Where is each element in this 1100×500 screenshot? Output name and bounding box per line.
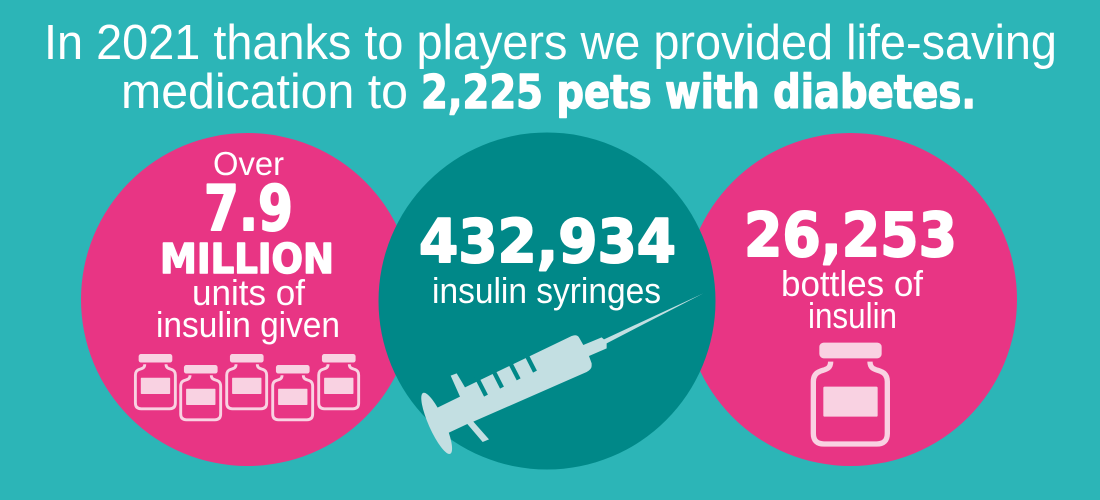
left pink circle bbox=[81, 133, 414, 466]
label: over 7.9 million units of insulin given: Over bbox=[213, 145, 284, 182]
label: over 7.9 million units of insulin given: units of bbox=[192, 272, 306, 313]
panel: 7.9 million units of insulin bbox=[81, 133, 414, 466]
label: 26,253 bottles of insulin bbox=[744, 200, 957, 336]
right pink circle bbox=[684, 133, 1017, 466]
label: 432,934 insulin syringes: 432,934 bbox=[419, 207, 676, 277]
panel: 432,934 insulin syringes bbox=[378, 132, 716, 470]
panel: 26,253 bottles of insulin bbox=[684, 133, 1017, 466]
icon: insulin bottle bbox=[813, 343, 887, 444]
label: 26,253 bottles of insulin: insulin bbox=[808, 295, 897, 336]
label: over 7.9 million units of insulin given: insulin given bbox=[156, 304, 340, 345]
icon: syringe bbox=[416, 293, 703, 457]
icon: five insulin vials bbox=[135, 354, 359, 420]
title: In 2021 thanks to players we provided life-saving bbox=[44, 16, 1057, 70]
title: medication to bbox=[121, 65, 408, 119]
title: 2,225 pets with diabetes. bbox=[421, 65, 976, 119]
label: over 7.9 million units of insulin given: 7.9 bbox=[204, 172, 293, 245]
label: over 7.9 million units of insulin given: MILLION bbox=[160, 235, 334, 283]
label: over 7.9 million units of insulin given bbox=[156, 145, 340, 345]
label: 432,934 insulin syringes bbox=[419, 207, 676, 311]
label: 432,934 insulin syringes: insulin syringes bbox=[432, 270, 661, 311]
centre teal circle bbox=[378, 132, 716, 470]
label: 26,253 bottles of insulin: bottles of bbox=[781, 263, 924, 304]
title bbox=[44, 16, 1057, 119]
label: 26,253 bottles of insulin: 26,253 bbox=[744, 200, 957, 271]
